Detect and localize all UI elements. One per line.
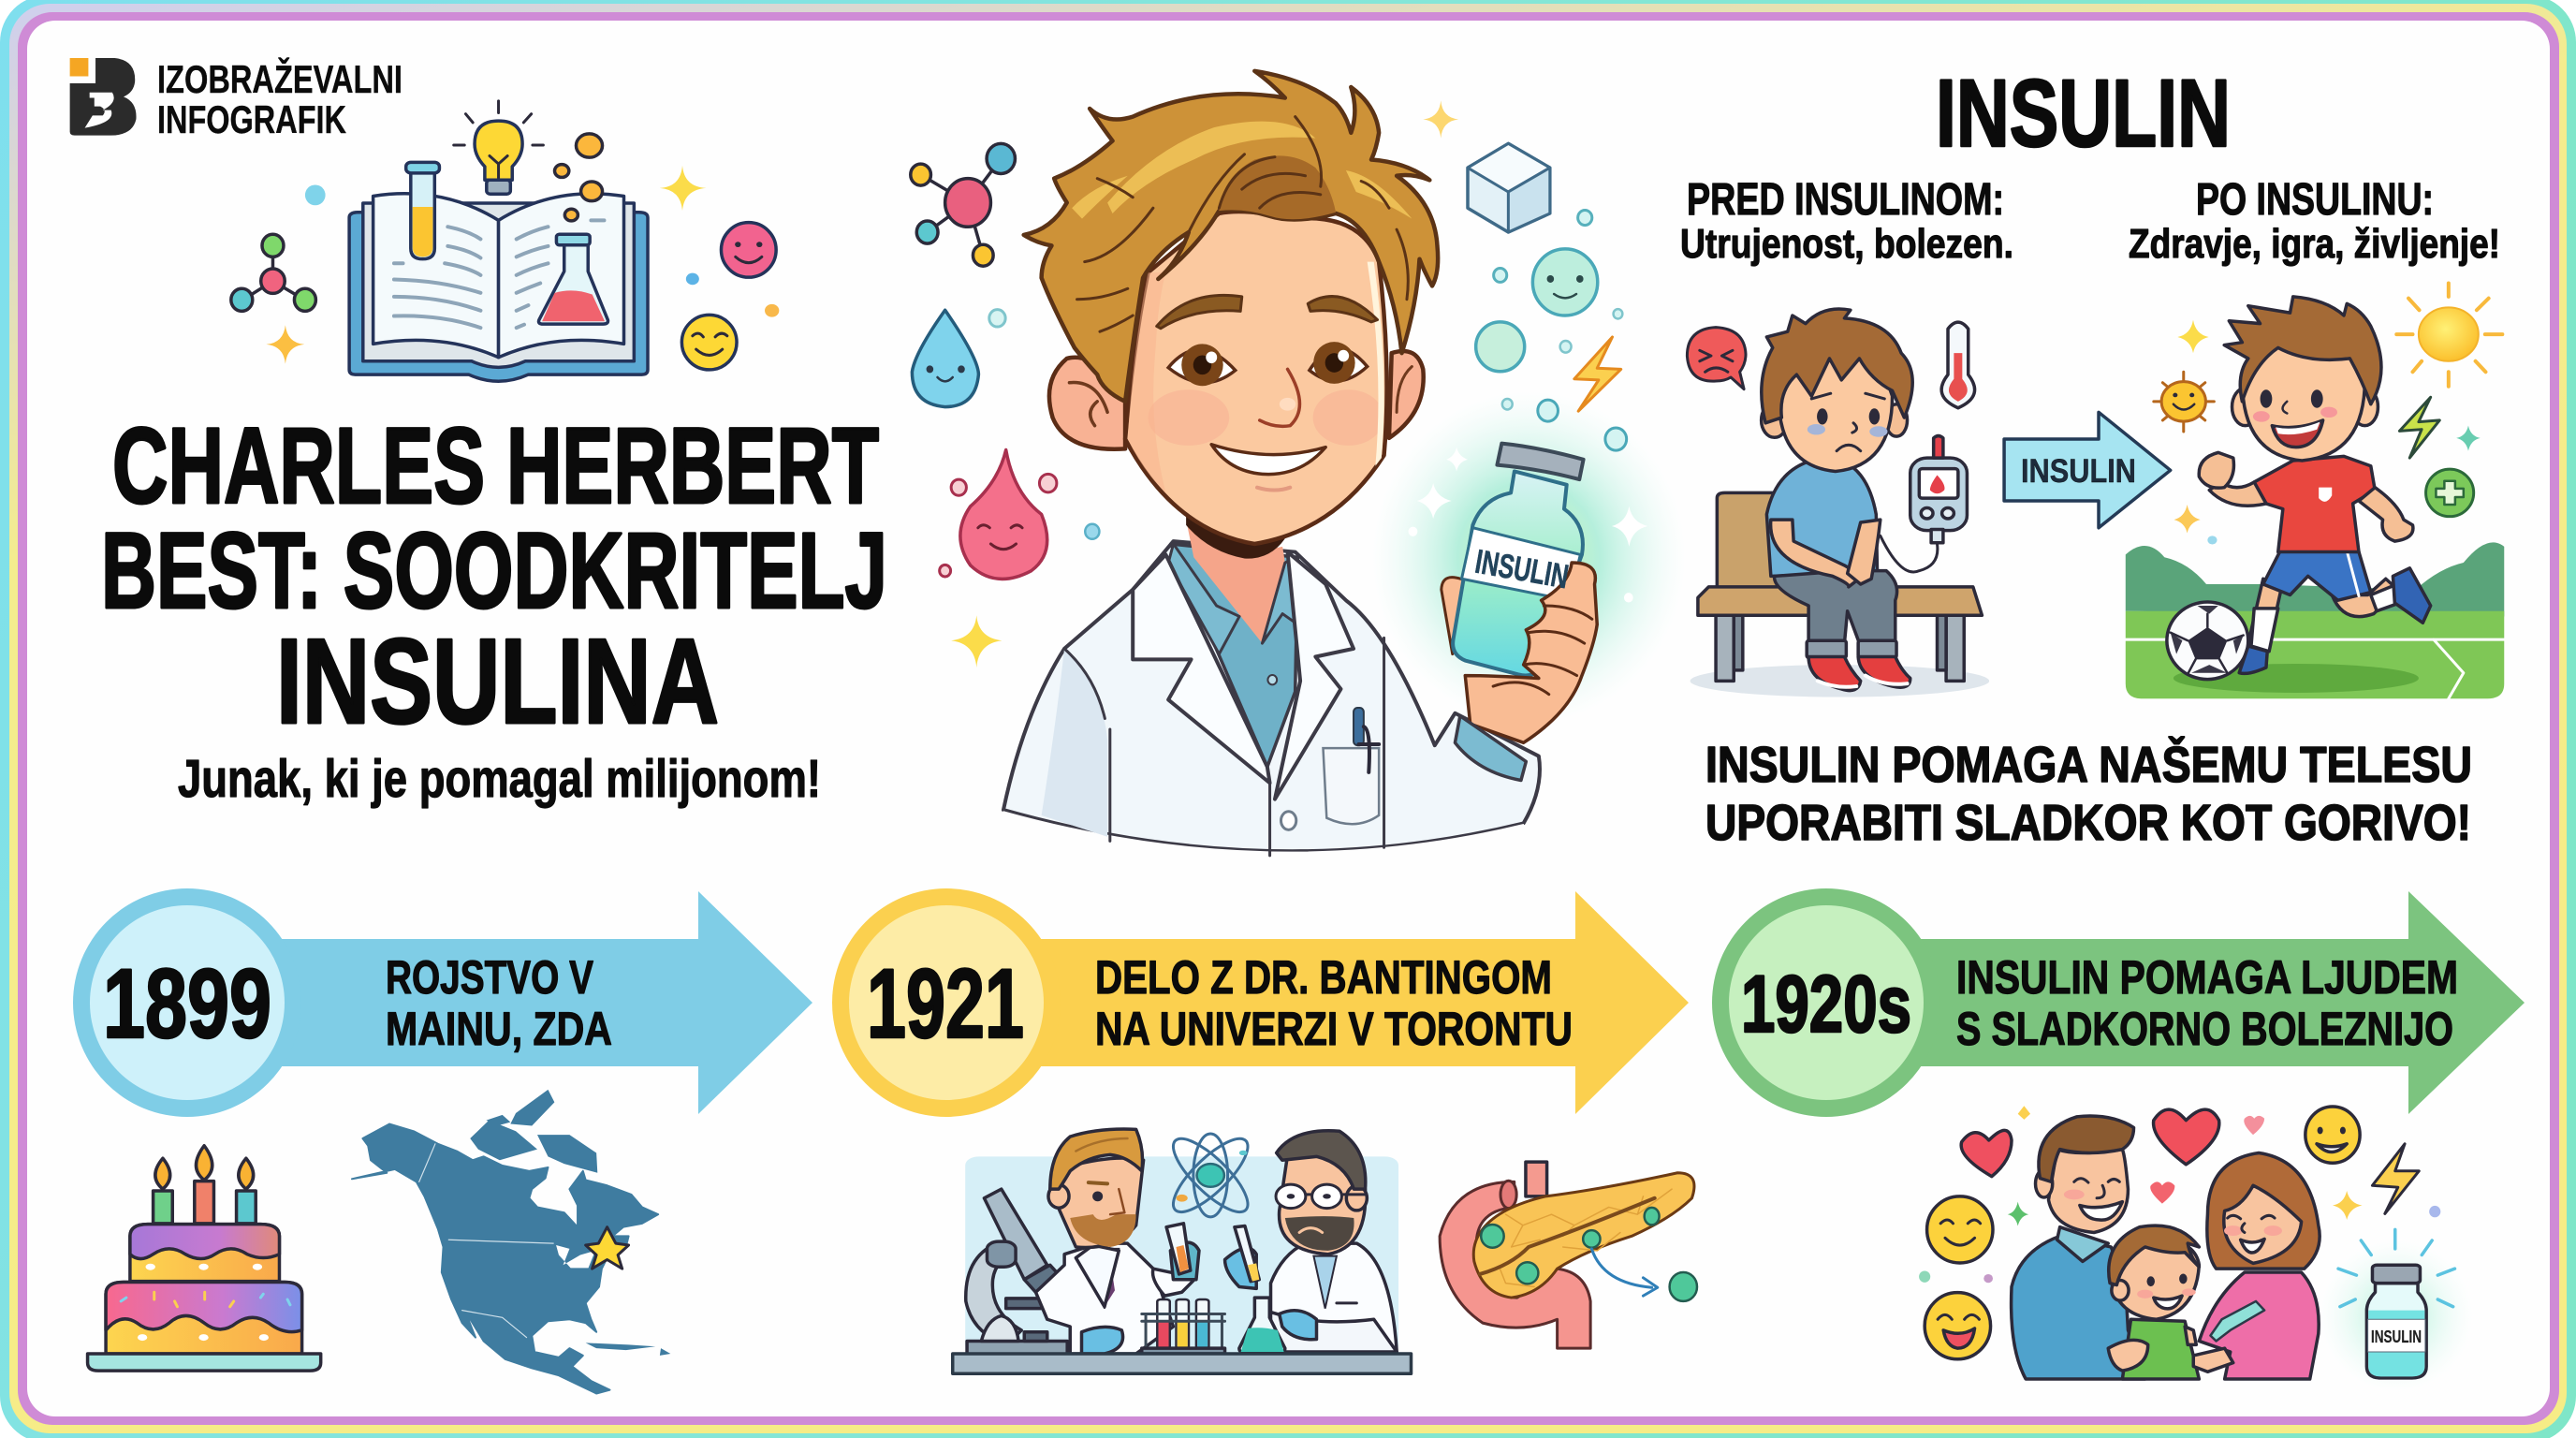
before insulin text: PRED INSULINOM: [1687,175,2004,225]
face [1125,212,1387,544]
glow and vial [2320,1240,2473,1392]
speech bubble sad [1687,328,1746,389]
hand back [1442,578,1472,654]
lightning and star [2372,1144,2419,1213]
timeline 1899: ROJSTVO V [386,951,593,1004]
body [1766,461,1878,576]
logo [70,56,402,141]
illustration: healthy boy playing football [2126,284,2504,698]
timeline 1921 [832,888,1689,1117]
timeline 1899: 1899 [103,949,271,1059]
timeline 1921: NA UNIVERZI V TORONTU [1095,1003,1573,1055]
nose and mouth [1260,369,1299,426]
shirt and neck [1171,544,1297,767]
head [1762,404,1788,437]
timeline 1920s [1712,888,2525,1117]
pocket and pen [1323,748,1379,824]
gloves [1081,1327,1123,1354]
insulin fuel statement: INSULIN POMAGA NAŠEMU TELESU [1705,736,2472,793]
before insulin text: Utrujenost, bolezen. [1680,221,2013,267]
child [2122,1319,2199,1379]
title: CHARLES HERBERT [112,406,879,526]
arrow: insulin [2004,412,2171,528]
bench [953,1354,1412,1373]
hand fingers [1465,563,1597,742]
after insulin text [2129,175,2500,267]
cuff [1455,716,1526,781]
vial label: INSULIN [1472,542,1572,595]
tubes and flask [1157,1299,1170,1348]
timeline 1920s: 1920s [1741,960,1911,1049]
lightning [1574,337,1621,411]
hands [2108,1340,2148,1371]
sugar cube [1468,143,1550,232]
molecule [921,158,1001,256]
sparkles around vial [1417,483,1452,519]
ball [2167,602,2248,680]
arms [2209,482,2266,506]
illustration: sick boy on bench [1687,309,1989,697]
icon: open book and science doodles [231,101,779,381]
mother [2207,1152,2320,1269]
illustration: Best and Banting in the lab [953,1129,1412,1373]
head [2232,388,2259,426]
star top right [1423,100,1458,139]
icon: birthday cake [88,1146,321,1371]
father [2012,1236,2145,1379]
timeline 1920s: S SLADKORNO BOLEZNIJO [1956,1003,2453,1055]
ears [1049,358,1125,449]
illustration: pancreas [1440,1162,1697,1348]
pink drop [960,449,1047,579]
map: North America with Maine star [352,1090,670,1393]
timeline 1921: DELO Z DR. BANTINGOM [1095,951,1552,1004]
glucometer [1881,536,1938,572]
timeline 1921: 1921 [867,949,1024,1059]
bubbles [1578,210,1592,226]
blue drop [912,310,978,407]
smileys [2305,1107,2360,1163]
subtitle: Junak, ki je pomagal milijonom! [178,749,821,809]
illustration: happy family with insulin [1919,1106,2473,1392]
title [101,406,887,749]
smiling small sun [2154,372,2214,432]
shirt [2254,456,2375,552]
arms [1771,520,1863,587]
logo: IZOBRAŽEVALNI [157,56,402,101]
logo: INFOGRAFIK [157,97,346,141]
insulin fuel statement [1705,736,2472,851]
eyes and brows [1157,295,1242,329]
atom [1160,1133,1261,1218]
arrow: insulin: INSULIN [2021,453,2136,490]
after insulin text: Zdravje, igra, življenje! [2129,221,2500,267]
hearts [1961,1130,2012,1177]
glow [1371,390,1686,724]
sun [2396,284,2502,387]
shorts [2263,550,2371,600]
left scientist coat [1036,1243,1173,1354]
hair [1024,71,1438,402]
thermometer [1941,322,1975,408]
family vial label: INSULIN [2371,1328,2422,1346]
timeline 1899 [73,888,812,1117]
vial [1453,444,1584,675]
legs [2248,579,2281,652]
insulin fuel statement: UPORABITI SLADKOR KOT GORIVO! [1705,795,2471,851]
syringe [2210,1301,2264,1341]
after insulin text: PO INSULINU: [2196,175,2434,225]
lapels [1133,554,1270,783]
microscope [966,1241,1021,1344]
right heading: INSULIN [1936,60,2231,167]
illustration: scientist Charles Best with insulin vial [911,71,1686,858]
right scientist coat [1271,1243,1397,1352]
lab coat [1003,541,1540,851]
timeline 1899: MAINU, ZDA [386,1003,612,1055]
timeline 1920s: INSULIN POMAGA LJUDEM [1956,951,2458,1004]
title: BEST: SOODKRITELJ [101,511,887,631]
title: INSULINA [276,614,719,749]
before insulin text [1680,175,2013,267]
